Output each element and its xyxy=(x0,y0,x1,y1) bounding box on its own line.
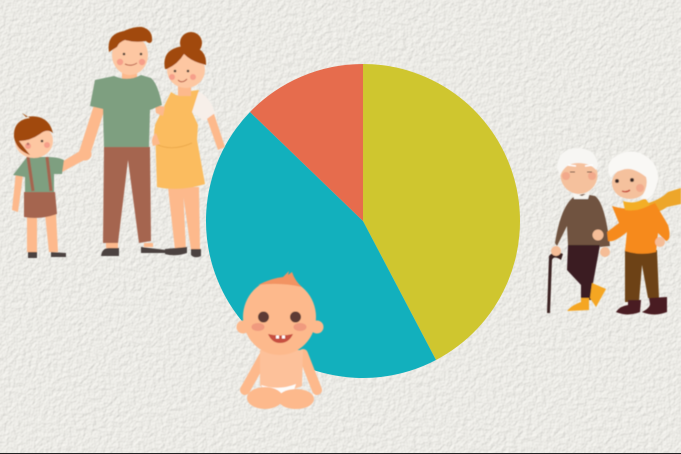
illustration: family xyxy=(12,27,225,258)
figure: woman xyxy=(152,32,225,257)
pie chart xyxy=(206,64,520,378)
bottom edge line xyxy=(0,453,681,454)
pie slice: teal xyxy=(206,112,436,378)
figure: grandfather xyxy=(547,148,610,313)
pie slice: yellow xyxy=(363,64,520,360)
figure: boy xyxy=(12,113,88,258)
illustration: elderly couple xyxy=(547,148,681,314)
illustration: baby xyxy=(236,271,324,409)
figure: grandmother xyxy=(592,151,681,314)
pie slice: orange xyxy=(250,64,363,221)
figure: man xyxy=(78,27,166,256)
